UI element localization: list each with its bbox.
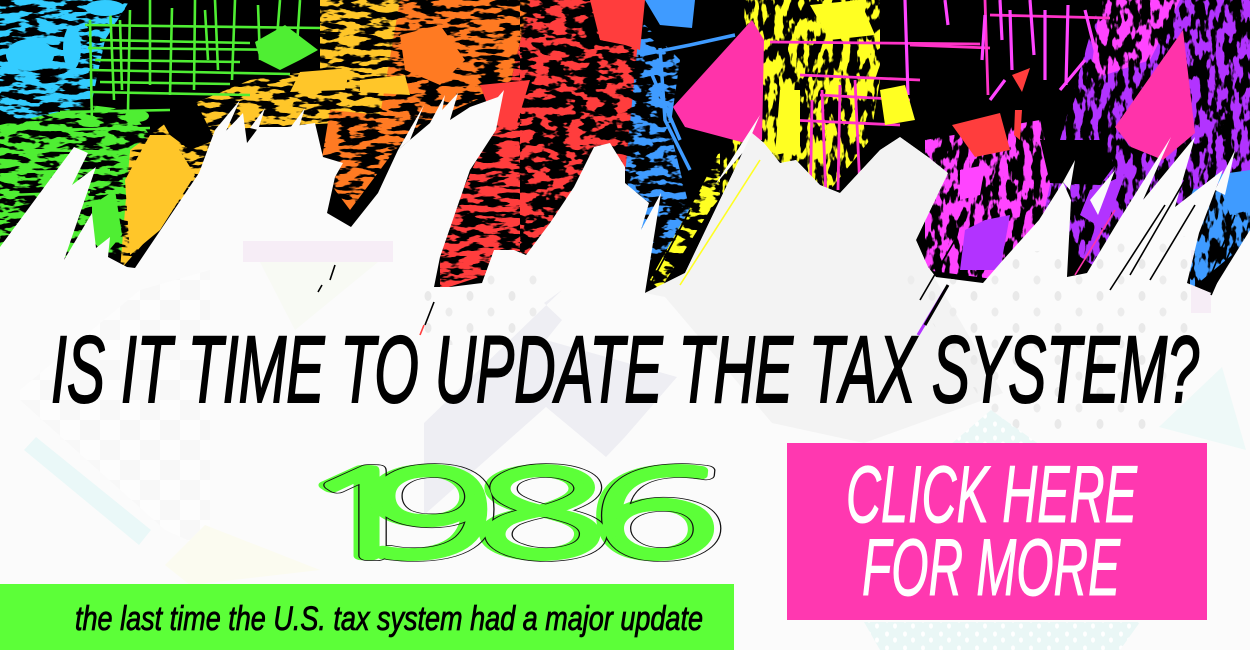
blue streaks <box>640 35 735 170</box>
year black outline <box>323 463 722 562</box>
green grid strokes <box>10 0 320 195</box>
faded background shapes <box>20 133 1250 650</box>
teal triangle <box>1159 367 1246 450</box>
colour zones <box>0 0 1250 290</box>
pink strip <box>243 241 393 262</box>
orange and yellow solids <box>125 0 695 255</box>
pink paint diamonds <box>673 20 1195 160</box>
teal dots lower <box>864 622 1140 650</box>
green blobs <box>92 25 318 255</box>
white brush spikes <box>215 95 1235 215</box>
teal dots triangle <box>952 410 1037 443</box>
grey lavender chevron <box>424 290 677 515</box>
pale green triangle <box>260 262 378 330</box>
red accents <box>952 68 1030 157</box>
dot pattern patches <box>424 276 536 345</box>
brush streak slashes <box>318 160 1235 335</box>
pale yellow wedge <box>165 525 320 585</box>
pink call-to-action button <box>787 443 1207 620</box>
year green fill: 1986 <box>292 454 721 574</box>
textured grey brush patch <box>645 133 948 293</box>
pink strip right <box>1191 250 1211 313</box>
paint splatter banner <box>0 0 1250 300</box>
big year 1986 <box>318 463 722 562</box>
yellow blobs <box>775 0 915 155</box>
pink grid strokes <box>770 0 1110 215</box>
green caption bar <box>0 584 734 650</box>
purple and magenta accents <box>960 165 1250 270</box>
pale blue bar <box>24 437 151 545</box>
caption text: the last time the U.S. tax system had a major update <box>75 600 703 638</box>
blue blobs <box>6 0 125 71</box>
checker patch <box>20 270 210 550</box>
solid black patches <box>150 100 1115 185</box>
magenta vertical streaks <box>905 0 1100 100</box>
black splatter texture <box>0 0 520 300</box>
